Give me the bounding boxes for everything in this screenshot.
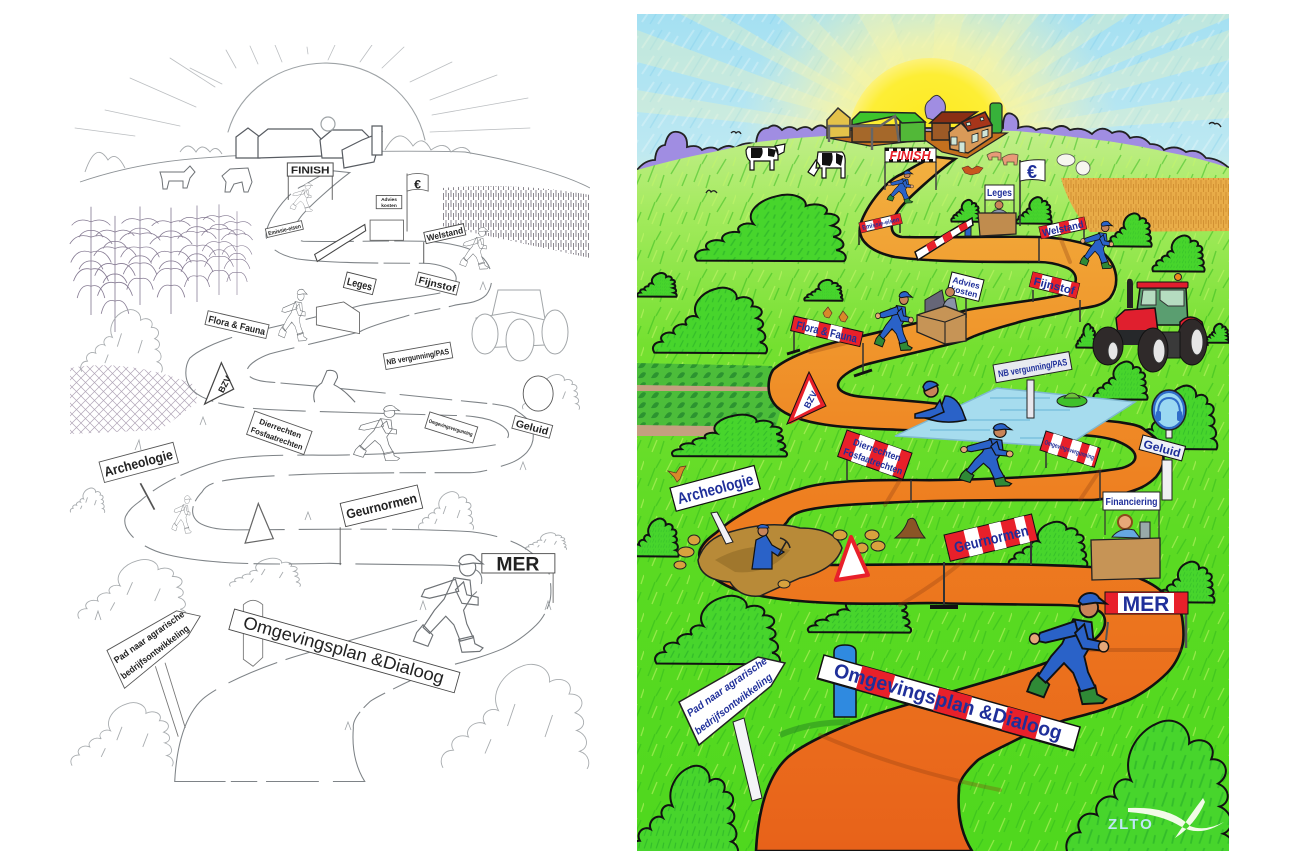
sky bbox=[637, 14, 1229, 168]
sign: NB vergunning/PAS bbox=[993, 352, 1072, 418]
grass texture bbox=[637, 130, 1229, 851]
Advies desk with clerk bbox=[917, 288, 966, 344]
sign: Welstand: Welstand bbox=[1041, 219, 1085, 239]
sketch sign: Fijnstof bbox=[415, 272, 459, 295]
sign: MER: MER bbox=[1123, 593, 1169, 616]
sheep bbox=[1057, 154, 1090, 175]
sign: Geurnormen: Geurnormen bbox=[952, 522, 1030, 557]
excavation pit bbox=[698, 525, 842, 596]
BZV warning triangle bbox=[787, 372, 826, 424]
sketch sign: NB vergunning: NB vergunning/PAS bbox=[386, 347, 450, 367]
farm ground bbox=[828, 130, 1007, 158]
sketch: desk bbox=[316, 220, 404, 334]
sun bbox=[850, 58, 1007, 128]
mole hill bbox=[895, 518, 925, 538]
euro flag: € bbox=[1027, 162, 1037, 182]
worker at Advies desk bbox=[874, 292, 913, 350]
sketch post: entrance post bbox=[243, 600, 263, 666]
sign: Fijnstof: Fijnstof bbox=[1032, 276, 1076, 298]
panel: pencil sketch bbox=[70, 45, 590, 782]
sketch sign: BZV: BZV bbox=[216, 374, 233, 394]
sketch: lower-left crop field bbox=[70, 365, 198, 434]
headphone sign and Geluid bbox=[1139, 390, 1186, 500]
brown house roof bbox=[930, 112, 977, 123]
euro flag bbox=[1020, 160, 1045, 226]
pigs bbox=[987, 152, 1018, 165]
sketch sign: Omgevingsvergunning: Omgevingsvergunning bbox=[428, 419, 473, 438]
sketch sign: Leges: Leges bbox=[346, 276, 373, 294]
sketch: figures bbox=[172, 183, 488, 652]
sign: Dierrechten Fosfaatrechten: Dierrechten bbox=[851, 437, 902, 464]
sketch: sun arc and rays bbox=[75, 45, 530, 140]
sign: Pad naar agrarische bedrijfsontwikkeling: bedrijfsontwikkeling bbox=[693, 671, 775, 737]
sketch sign: Archeologie: Archeologie bbox=[103, 447, 175, 480]
brown house bbox=[932, 123, 950, 140]
yellow shed bbox=[827, 108, 850, 138]
sketch: wheat field bbox=[442, 186, 590, 258]
sketch sign: Flora and Fauna: Flora & Fauna bbox=[207, 314, 267, 338]
sign: Omgevingsvergunning bbox=[1040, 431, 1100, 500]
sign: Emissie-eisen: Emissie-eisen bbox=[862, 216, 900, 232]
worker digging with pick axe bbox=[752, 524, 790, 569]
road shadows bbox=[810, 237, 1180, 790]
blue entrance post bbox=[834, 645, 856, 717]
sky brush texture bbox=[637, 14, 1229, 168]
sketch sign: Omgevingsvergunning bbox=[425, 412, 478, 443]
sketch sign: Omgevingsplan: Omgevingsplan &Dialoog bbox=[241, 612, 446, 688]
Leges desk: Leges bbox=[987, 188, 1012, 199]
warning triangle bbox=[836, 537, 868, 580]
sketch: winding road bbox=[125, 171, 551, 782]
bird on Archeologie sign bbox=[668, 466, 686, 482]
sketch sign: Advies kosten: Advies bbox=[381, 197, 397, 203]
sign: NB vergunning/PAS: NB vergunning/PAS bbox=[997, 357, 1068, 380]
sketch: grass tufts bbox=[95, 282, 551, 730]
worker walking through the pond edge bbox=[959, 424, 1013, 486]
sketch: signs and figures at common scale bbox=[99, 163, 555, 737]
sketch: horizon hill bbox=[80, 151, 590, 188]
purple tree behind farm bbox=[925, 95, 945, 122]
sketch sign: Advies kosten: kosten bbox=[381, 203, 397, 209]
sign: Flora and Fauna bbox=[787, 316, 872, 376]
sign: Pad naar agrarische bedrijfsontwikkeling: Pad naar agrarische bbox=[685, 655, 770, 719]
sketch sign: MER: MER bbox=[496, 553, 539, 575]
finish gate bbox=[885, 148, 936, 190]
house door and windows bbox=[951, 117, 988, 153]
ZLTO logo bbox=[1108, 798, 1224, 838]
sketch: barrier bbox=[315, 225, 366, 261]
sign: Archeologie: Archeologie bbox=[676, 471, 755, 508]
sketch sign: Pad naar arrow: Pad naar agrarische bbox=[112, 609, 186, 665]
pond ripples bbox=[930, 398, 1070, 438]
sign: Advies kosten: kosten bbox=[950, 283, 979, 300]
sign: Geurnormen bbox=[930, 514, 1038, 607]
sign: Dierrechten Fosfaatrechten bbox=[838, 430, 912, 503]
ZLTO logo: ZLTO bbox=[1108, 816, 1154, 833]
birds on Flora sign bbox=[823, 307, 848, 322]
sign: Welstand bbox=[1039, 217, 1087, 262]
sketch: euro flag bbox=[407, 173, 428, 232]
sketch: euro flag: € bbox=[414, 177, 421, 191]
cow right bbox=[808, 152, 845, 178]
BZV warning triangle: BZV bbox=[802, 389, 819, 410]
sketch: hedge bumps on horizon bbox=[85, 136, 471, 172]
Financiering desk: Financiering bbox=[1106, 497, 1158, 508]
main house roof bbox=[962, 112, 992, 131]
sketch: bushes bbox=[70, 310, 589, 769]
sketch post: Archeologie bbox=[140, 483, 154, 510]
silo bbox=[990, 103, 1002, 133]
sketch post: Geurnormen bbox=[339, 527, 341, 565]
bushes bbox=[630, 195, 1234, 857]
sketch post: Welstand bbox=[423, 242, 425, 263]
sketch: corn field bbox=[70, 204, 253, 332]
sketch sign: Geluid bbox=[512, 415, 553, 439]
worker at finish bbox=[887, 171, 914, 203]
sketch sign: BZV bbox=[205, 363, 234, 404]
sketch sign: Geurnormen: Geurnormen bbox=[345, 490, 418, 522]
sign: Omgevingsvergunning: Omgevingsvergunning bbox=[1043, 439, 1095, 462]
sketch sign: Pad naar arrow: bedrijfsontwikkeling bbox=[119, 623, 191, 681]
sketch: tractor bbox=[472, 290, 568, 361]
cow left bbox=[746, 144, 785, 170]
headphone sign and Geluid: Geluid bbox=[1142, 439, 1182, 460]
sign: Archeologie bbox=[670, 465, 760, 544]
chickens bbox=[962, 166, 983, 175]
sketch sign: Dierrechten: Fosfaatrechten bbox=[250, 425, 304, 452]
barn frame bbox=[829, 116, 899, 150]
barn side bbox=[900, 122, 925, 142]
big barn bbox=[852, 125, 900, 142]
sketch sign: MER bbox=[482, 553, 555, 603]
worker wading in pond bbox=[915, 381, 966, 422]
sun glow bbox=[756, 14, 1102, 134]
sun rays bbox=[637, 14, 1229, 140]
vegetable field bbox=[637, 363, 785, 436]
main house walls bbox=[949, 123, 992, 153]
sketch: cows bbox=[160, 166, 252, 192]
sign: MER bbox=[1105, 592, 1188, 648]
sketch sign: FINISH: FINISH bbox=[291, 164, 330, 176]
sign: Emissie-eisen bbox=[859, 214, 902, 245]
purple tree line on horizon bbox=[637, 112, 1229, 170]
sketch sign: FINISH bbox=[287, 163, 333, 200]
barn roof bbox=[852, 112, 925, 125]
sign: Advies kosten: Advies bbox=[952, 275, 981, 291]
sketch: farm buildings bbox=[236, 117, 382, 168]
sign: Omgevingsplan and Dialoog: Omgevingsplan &Dialoog bbox=[831, 660, 1064, 745]
sign: Fijnstof bbox=[1029, 272, 1080, 322]
sketch sign: Welstand: Welstand bbox=[426, 225, 464, 243]
tractor bbox=[1093, 274, 1208, 372]
Financiering desk bbox=[1091, 492, 1160, 580]
sketch: triangle sign bbox=[245, 503, 273, 543]
sign: Advies kosten bbox=[947, 272, 984, 318]
sketch sign: Emissie-eisen: Emissie-eisen bbox=[268, 224, 302, 237]
barrier bbox=[915, 218, 973, 260]
sign: Flora and Fauna: Flora & Fauna bbox=[795, 320, 859, 346]
frog on lily pad bbox=[1057, 393, 1087, 407]
small birds bbox=[706, 122, 1221, 193]
sketch sign: Advies kosten bbox=[376, 195, 402, 209]
panel: coloured illustration bbox=[630, 0, 1234, 857]
finish gate: FINISH bbox=[890, 149, 931, 163]
Leges desk bbox=[978, 185, 1016, 236]
large worker with magnifier bbox=[1027, 593, 1109, 704]
rocks around pit bbox=[674, 530, 885, 588]
wheat field bbox=[1061, 178, 1229, 232]
sign: Dierrechten Fosfaatrechten: Fosfaatrechten bbox=[842, 446, 904, 478]
winding road bbox=[699, 157, 1184, 851]
sketch sign: Fijnstof: Fijnstof bbox=[417, 275, 458, 295]
worker at Welstand bbox=[1080, 221, 1113, 269]
post shadow bbox=[780, 722, 850, 735]
sketch sign: Geluid: Geluid bbox=[514, 419, 549, 438]
sign: Pad naar agrarische bedrijfsontwikkeling bbox=[679, 655, 785, 801]
sketch sign: Dierrechten: Dierrechten bbox=[258, 417, 303, 440]
sketch sign: Dierrechten bbox=[247, 411, 312, 455]
sketch: headphone sign bbox=[523, 376, 553, 411]
pond bbox=[895, 388, 1135, 447]
farm bbox=[827, 103, 1007, 158]
sketch sign: Pad naar arrow bbox=[107, 609, 200, 737]
green meadow bbox=[637, 130, 1229, 851]
